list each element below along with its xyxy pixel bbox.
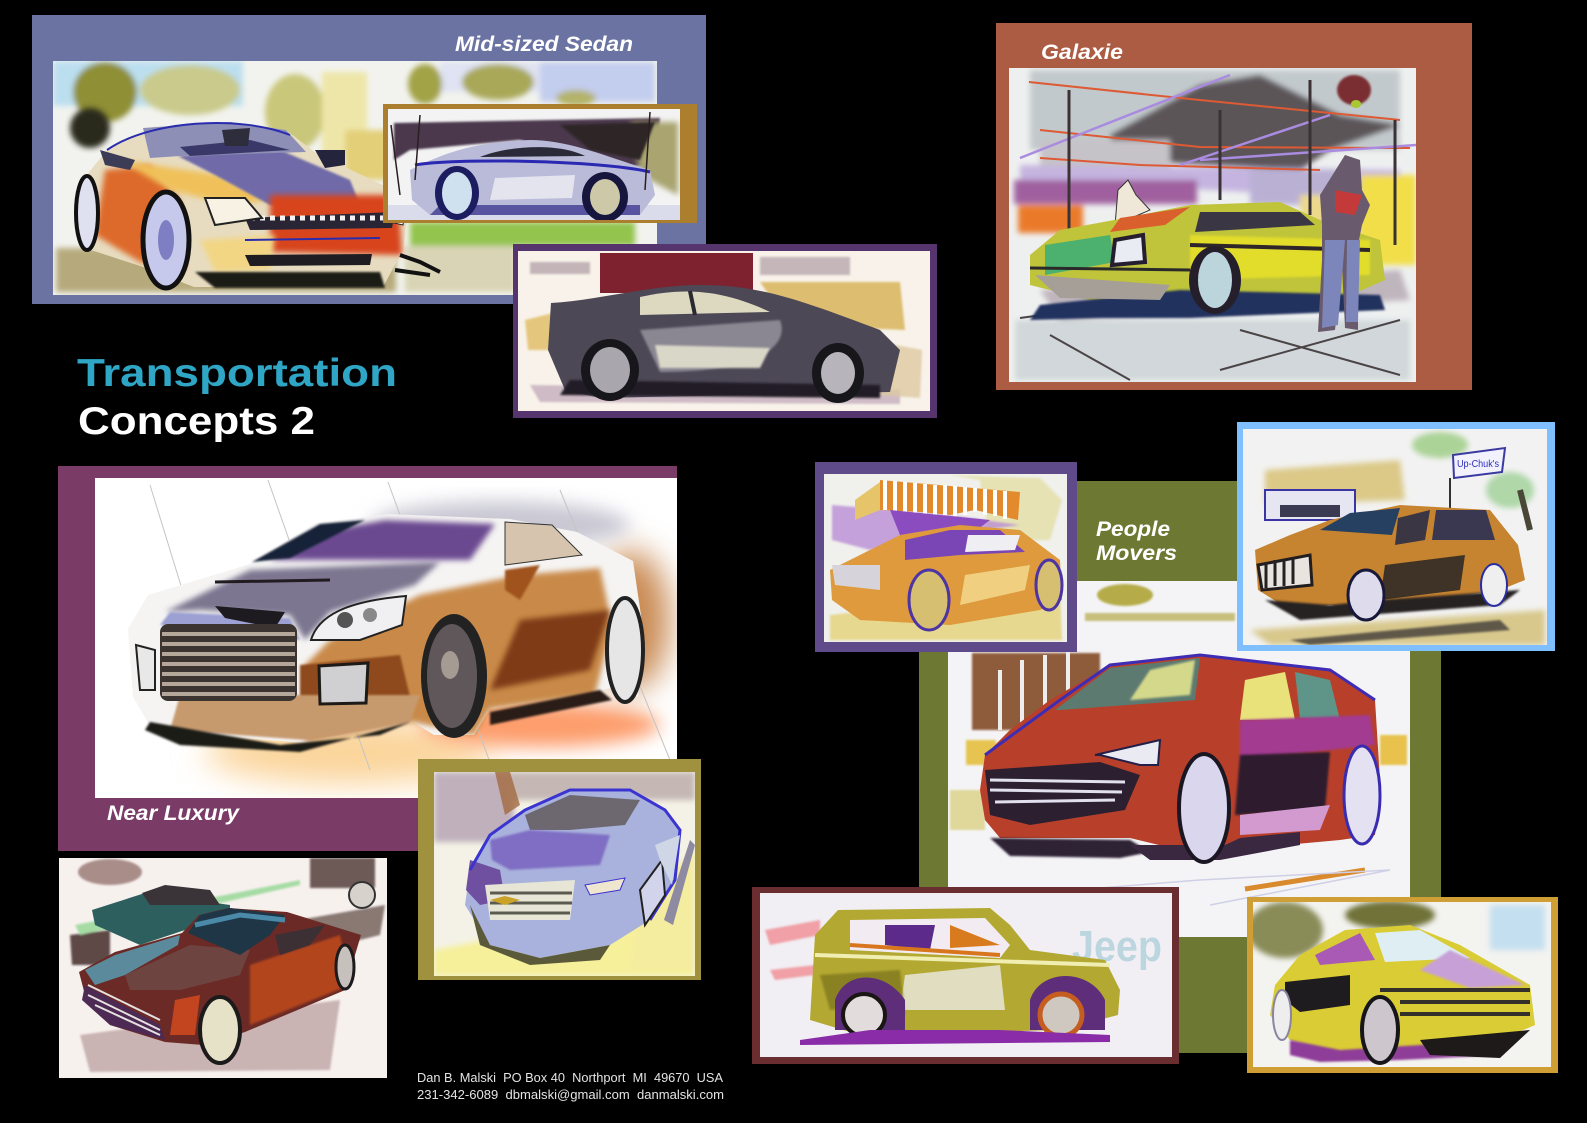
car xyxy=(1030,202,1385,300)
sketch: brown crossover: Up-Chuk's xyxy=(1457,459,1499,470)
panel: mid-sized sedan xyxy=(32,15,706,304)
sketch: sedan front three-quarter view in landscape xyxy=(53,61,657,295)
body xyxy=(128,514,643,743)
inset frame: side view coupe xyxy=(383,104,697,223)
inset frame: yellow hatchback xyxy=(1247,897,1558,1073)
man at left xyxy=(1115,180,1150,225)
contact line: address: Dan B. Malski PO Box 40 Northport MI 49670 USA xyxy=(417,1071,724,1085)
contact footer xyxy=(417,1071,724,1102)
title line: Transportation: Transportation xyxy=(77,352,397,395)
inset frame: yellow jeep SUV xyxy=(752,887,1179,1064)
sketch: Galaxie at roadside stand xyxy=(1009,68,1416,382)
panel background: slate blue xyxy=(32,15,706,304)
inset frame: dark sedan side view xyxy=(513,244,937,418)
sketch: yellow hatchback xyxy=(1247,901,1551,1067)
grille xyxy=(160,624,297,701)
sketch: blue muscle sedan xyxy=(434,772,695,976)
panel background: terracotta xyxy=(996,23,1472,390)
hood xyxy=(165,562,440,640)
sketch: red coupe with convertible behind xyxy=(59,858,387,1078)
headlamp xyxy=(311,596,406,640)
frame: gold xyxy=(383,104,697,223)
sketch: dark sedan xyxy=(518,251,930,411)
sketch: brown crossover xyxy=(1243,429,1547,645)
red sign xyxy=(1337,75,1371,105)
windshield xyxy=(270,520,495,560)
frame: maroon xyxy=(752,887,1179,1064)
frame: purple xyxy=(513,244,937,418)
heading: Mid-sized Sedan: Mid-sized Sedan xyxy=(455,33,633,56)
inset frame: brown crossover at Up-Chuk's xyxy=(1237,422,1555,651)
side intake xyxy=(136,645,155,690)
panel: Galaxie xyxy=(996,23,1472,390)
fog lamp xyxy=(319,663,368,704)
inset frame: blue muscle sedan xyxy=(418,759,701,980)
title line: Concepts 2: Concepts 2 xyxy=(78,400,315,443)
title xyxy=(77,352,397,443)
sketch: yellow jeep SUV xyxy=(760,893,1172,1057)
sketch: near luxury sedan front three-quarter xyxy=(95,478,677,798)
heading: Near Luxury: Near Luxury xyxy=(107,802,240,825)
frame: violet xyxy=(815,462,1077,652)
rear wheel xyxy=(607,598,643,702)
panel background: olive green xyxy=(919,481,1441,1053)
heading line: People: People xyxy=(1096,518,1170,541)
front wheel xyxy=(421,614,487,738)
panel background: plum xyxy=(58,466,677,851)
car body xyxy=(77,122,408,287)
man standing xyxy=(1318,155,1370,332)
panel: people movers xyxy=(919,481,1441,1053)
wheels xyxy=(76,176,98,250)
sketch: side view coupe xyxy=(388,109,680,222)
heading: Galaxie: Galaxie xyxy=(1041,41,1123,64)
heading: People Movers xyxy=(1096,518,1177,565)
sketch: orange sedan with awning xyxy=(824,474,1067,642)
frame: olive gold xyxy=(418,759,701,980)
panel: near luxury xyxy=(58,466,677,851)
contact line: phone, email, web: 231-342-6089 dbmalski@gmail.com danmalski.com xyxy=(417,1088,724,1102)
frame: mustard xyxy=(1247,897,1558,1073)
frame: light blue xyxy=(1237,422,1555,651)
heading line: Movers: Movers xyxy=(1096,542,1177,565)
inset frame: orange sedan with awning xyxy=(815,462,1077,652)
sketch: yellow jeep SUV: Jeep xyxy=(1072,922,1162,971)
sketch: red and purple people mover xyxy=(948,581,1410,937)
